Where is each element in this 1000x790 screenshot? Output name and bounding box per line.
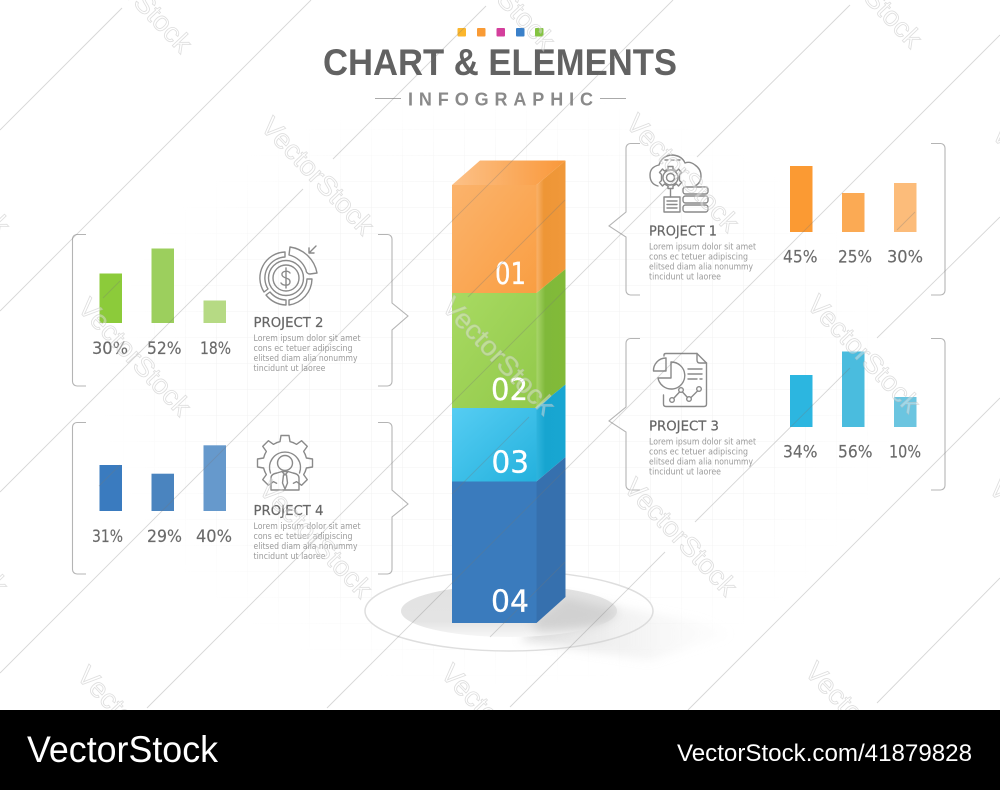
body text: Lorem ipsum dolor sit amet [254,522,361,532]
project heading: PROJECT 2 [254,315,324,331]
subtitle: INFOGRAPHIC [408,90,593,110]
panel: project 4 [72,422,408,574]
segment 02 [452,269,566,408]
bar chart: 56% [838,442,872,462]
body text: Lorem ipsum dolor sit amet [649,438,757,448]
body text: cons ec tetuer adipiscing [649,252,748,262]
bar chart [783,166,923,266]
text: VectorStock [436,291,561,421]
body text: tincidunt ut laoree [649,272,721,282]
segment 03 [452,384,566,482]
body text: elitsed diam alia nonummy [649,458,753,468]
project heading: PROJECT 4 [254,503,324,519]
segment 02: 02 [491,373,528,408]
project heading: PROJECT 1 [649,224,717,240]
bar chart: 30% [92,339,128,358]
title: CHART & ELEMENTS [323,42,677,83]
text: VectorStock [255,111,380,241]
footer bar [0,710,1000,790]
decorative color squares [458,28,544,36]
bar chart: 30% [887,248,923,266]
body text [649,242,757,282]
body text: tincidunt ut laoree [254,364,326,374]
body text: tincidunt ut laoree [254,552,326,562]
segment 04 [452,457,566,623]
bar chart: 18% [200,339,231,358]
icon: cloud gear database [650,155,708,212]
text: VectorStock [72,292,197,422]
panel: project 3 [609,338,945,490]
project heading: PROJECT 3 [649,418,719,434]
body text: elitsed diam alia nonummy [649,262,753,272]
bar chart: 34% [783,442,818,462]
panel: project 1 [609,144,945,295]
bar chart: 40% [196,527,232,546]
body text [254,522,361,562]
panel bracket [72,422,408,574]
column top face [452,160,566,185]
bar chart [92,445,232,546]
body text: Lorem ipsum dolor sit amet [254,334,361,344]
body text: cons ec tetuer adipiscing [649,448,748,458]
text: VectorStock [71,660,196,790]
footer brand: VectorStock [27,729,218,770]
text: VectorStock [799,656,924,786]
bar chart: 31% [92,527,123,546]
segment 04: 04 [491,585,529,620]
panel bracket [609,338,945,490]
segment 03: 03 [492,446,529,481]
body text: elitsed diam alia nonummy [254,354,358,364]
panel: project 2 [72,234,408,386]
text: VectorStock [620,108,745,238]
panel bracket [609,144,945,295]
icon: money target [260,246,317,305]
segment 01 [452,160,566,293]
platform base [365,571,730,660]
bar chart [92,248,231,358]
body text: tincidunt ut laoree [649,468,721,478]
body text: Lorem ipsum dolor sit amet [649,242,757,252]
segment 01: 01 [495,257,526,292]
bar chart: 25% [838,248,872,266]
body text: cons ec tetuer adipiscing [254,532,352,542]
body text [254,334,361,374]
bar chart: 29% [147,527,182,546]
text: VectorStock [801,289,926,419]
3D column [452,160,566,623]
bar chart: 45% [783,248,818,266]
bar chart: 10% [889,442,921,462]
text: VectorStock [435,658,560,788]
body text: elitsed diam alia nonummy [254,542,358,552]
bar chart [783,352,921,462]
text: VectorStock [618,472,743,602]
body text [649,438,757,478]
bar chart: 52% [147,339,182,358]
body text: cons ec tetuer adipiscing [254,344,352,354]
text: VectorStock [253,474,378,604]
footer image id: VectorStock.com/41879828 [677,740,972,767]
icon: gear with person [258,436,312,490]
icon: report document [653,354,706,406]
panel bracket [72,234,408,386]
